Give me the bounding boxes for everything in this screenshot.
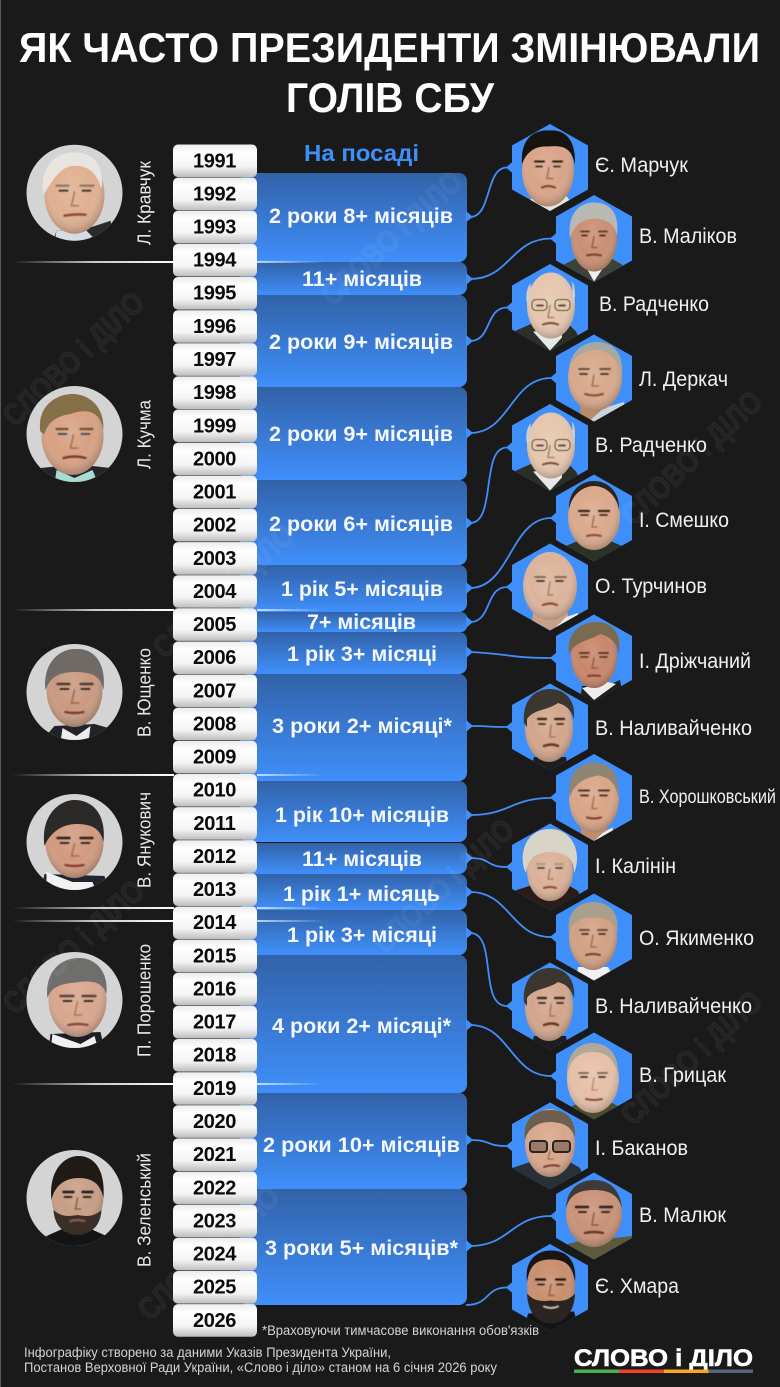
security chief names: В. Малюк	[639, 1204, 727, 1227]
president: Yanukovych	[26, 794, 122, 892]
watermarks: СЛОВО і ДІЛО	[314, 164, 469, 312]
president: Poroshenko	[26, 952, 122, 1050]
security chief names: О. Якименко	[639, 927, 754, 950]
year 2019	[173, 1072, 257, 1105]
year 2022: 2022	[193, 1177, 236, 1199]
year 2016	[173, 973, 257, 1005]
year 2018	[173, 1039, 257, 1072]
portrait: Hrytsak	[550, 1032, 632, 1120]
security chief names: В. Наливайченко	[595, 995, 752, 1018]
portrait: Radchenko, second term	[506, 404, 588, 492]
year 2004	[173, 575, 257, 608]
year 2011	[173, 807, 257, 840]
year 2010: 2010	[193, 780, 236, 802]
year 2004: 2004	[193, 581, 237, 603]
year 2002	[173, 509, 257, 542]
portrait: Khmara	[506, 1244, 588, 1332]
president: Kravchuk	[26, 145, 122, 243]
portrait: Kalinin	[506, 824, 588, 911]
portrait: Khoroshkovskyi	[550, 754, 632, 842]
security chief names: Л. Деркач	[639, 368, 728, 391]
year 2000: 2000	[193, 448, 236, 470]
bar: Kalinin term: 11+ місяців	[302, 847, 422, 871]
year 1994: 1994	[193, 249, 237, 271]
watermarks: СЛОВО і ДІЛО	[0, 285, 151, 433]
year 1991	[173, 144, 257, 177]
bar: Malikov term	[240, 262, 473, 295]
bar: Malikov term: 11+ місяців	[302, 267, 422, 291]
year 2001	[173, 476, 257, 508]
year 1993: 1993	[193, 216, 236, 238]
year 1991: 1991	[193, 150, 236, 172]
security chief names: І. Дріжчаний	[639, 650, 751, 673]
year 1999	[173, 410, 257, 442]
year 2020: 2020	[193, 1111, 236, 1133]
year 2006: 2006	[193, 647, 236, 669]
timeline of years	[173, 144, 257, 1337]
connector lines from bars to portraits	[466, 168, 551, 1305]
year 2012	[173, 840, 257, 873]
security chief names: О. Турчинов	[595, 575, 707, 598]
watermarks: СЛОВО і ДІЛО	[0, 873, 151, 1021]
year 1996: 1996	[193, 316, 236, 338]
column heading: in office: На посаді	[304, 140, 419, 166]
year 2026: 2026	[193, 1310, 236, 1332]
bar: Marchuk term: 2 роки 8+ місяців	[269, 204, 453, 228]
year 1993	[173, 211, 257, 243]
watermarks: СЛОВО і ДІЛО	[131, 1179, 286, 1327]
president names, rotated: В. Янукович	[134, 792, 154, 888]
bar: Radchenko term	[240, 295, 473, 387]
security chief names: Є. Хмара	[595, 1275, 679, 1298]
source note: Інфографіку створено за даними Указів Президента України,	[24, 1345, 391, 1360]
year 2008: 2008	[193, 713, 236, 735]
year 2017: 2017	[193, 1012, 236, 1034]
portrait: Malikov	[550, 195, 632, 282]
security chief names: І. Калінін	[595, 855, 676, 878]
year 2025	[173, 1271, 257, 1304]
bar: Derkach term	[240, 387, 473, 480]
year 2024	[173, 1238, 257, 1270]
year 2005: 2005	[193, 614, 236, 636]
portrait: Marchuk	[506, 124, 588, 212]
year 2019: 2019	[193, 1078, 236, 1100]
president names, rotated: В. Зеленський	[134, 1153, 154, 1267]
president names, rotated: В. Ющенко	[134, 648, 154, 737]
year 2009	[173, 741, 257, 774]
year 2011: 2011	[194, 813, 236, 835]
year 2006	[173, 642, 257, 674]
portrait: Turchynov	[506, 544, 588, 631]
bar: Bakanov term	[240, 1093, 473, 1189]
year 2007: 2007	[193, 680, 236, 702]
bar: Khoroshkovskyi term	[240, 781, 473, 842]
president: Yushchenko	[26, 644, 122, 742]
president names, rotated	[134, 161, 154, 1267]
bar: Marchuk term	[240, 173, 473, 262]
portrait: Nalyvaichenko	[506, 684, 588, 771]
portrait: Bakanov	[506, 1102, 588, 1190]
bar: Drizhchanyi term: 1 рік 3+ місяці	[287, 642, 437, 666]
year 1998	[173, 376, 257, 409]
bar: Hrytsak term: 4 роки 2+ місяці*	[272, 1014, 452, 1038]
year 2015: 2015	[193, 945, 236, 967]
president names, rotated: Л. Кучма	[134, 399, 154, 469]
year 2014	[173, 906, 257, 939]
portrait: Derkach	[550, 334, 632, 422]
president: Kuchma	[26, 386, 122, 484]
president names, rotated: П. Порошенко	[134, 944, 154, 1057]
year 1995	[173, 277, 257, 310]
security chief names: В. Наливайченко	[595, 717, 752, 740]
year 1995: 1995	[193, 282, 236, 304]
portrait: Smeshko	[550, 474, 632, 562]
year 1992	[173, 178, 257, 210]
watermarks: СЛОВО і ДІЛО	[366, 812, 521, 960]
bar: Turchynov term: 7+ місяців	[307, 610, 416, 634]
year 1992: 1992	[193, 183, 236, 205]
bar: Hrytsak term	[240, 955, 473, 1093]
bar: Maliuk term: 3 роки 5+ місяців*	[265, 1236, 459, 1260]
year 2017	[173, 1006, 257, 1038]
security chief names: В. Грицак	[639, 1064, 727, 1087]
president names, rotated: Л. Кравчук	[134, 161, 154, 245]
year 2005	[173, 608, 257, 641]
year 2026	[173, 1304, 257, 1337]
presidential term divider lines	[12, 261, 325, 1085]
bar: Radchenko second term: 2 роки 6+ місяців	[269, 512, 453, 536]
year 2020	[173, 1105, 257, 1138]
bar: Smeshko term: 1 рік 5+ місяців	[281, 577, 443, 601]
year 2003	[173, 542, 257, 575]
president: Zelensky	[26, 1150, 122, 1248]
bar: Drizhchanyi term	[240, 632, 473, 674]
year 2003: 2003	[193, 548, 236, 570]
year 2012: 2012	[193, 846, 236, 868]
year 2018: 2018	[193, 1045, 236, 1067]
year 2001: 2001	[193, 482, 236, 504]
year 2002: 2002	[193, 515, 236, 537]
bar: Nalyvaichenko second term: 1 рік 3+ місяці	[287, 923, 437, 947]
portrait: Yakymenko	[550, 894, 632, 981]
bar: Derkach term: 2 роки 9+ місяців	[269, 422, 453, 446]
year 2013: 2013	[193, 879, 236, 901]
portrait: Drizhchanyi	[550, 614, 632, 702]
security chief names: В. Радченко	[599, 293, 709, 316]
terms of office bars	[240, 173, 473, 1305]
year 2014: 2014	[193, 912, 237, 934]
year 1996	[173, 310, 257, 343]
bar: Smeshko term	[240, 565, 473, 612]
bar: Yakymenko term: 1 рік 1+ місяць	[283, 882, 440, 906]
title: ГОЛІВ СБУ	[286, 74, 495, 121]
security chief names: В. Радченко	[595, 434, 707, 457]
security chief names	[595, 154, 776, 1298]
portrait: Radchenko	[506, 264, 588, 352]
bar: Bakanov term: 2 роки 10+ місяців	[263, 1133, 460, 1157]
year 2021: 2021	[193, 1144, 236, 1166]
year 2013	[173, 873, 257, 906]
year 2009: 2009	[193, 747, 236, 769]
bar: Nalyvaichenko term	[240, 674, 473, 781]
logo: Слово і діло: СЛОВО і ДІЛО	[574, 1345, 753, 1372]
bar: Yakymenko term	[240, 874, 473, 910]
title	[19, 24, 760, 121]
year 2022	[173, 1172, 257, 1204]
security chief names: Є. Марчук	[595, 154, 689, 177]
portrait: Nalyvaichenko, second term	[506, 962, 588, 1050]
year 2024: 2024	[193, 1243, 237, 1265]
security chief names: В. Маліков	[639, 225, 737, 248]
source note: Постанов Верховної Ради України, «Слово і діло» станом на 6 січня 2026 року	[24, 1360, 497, 1375]
year 2008	[173, 708, 257, 740]
bar: Radchenko second term	[240, 480, 473, 565]
year 1997: 1997	[193, 349, 236, 371]
year 1999: 1999	[193, 415, 236, 437]
year 2023	[173, 1205, 257, 1237]
year 2010	[173, 774, 257, 807]
year 2023: 2023	[193, 1210, 236, 1232]
portrait: Maliuk	[550, 1172, 632, 1260]
year 2000	[173, 443, 257, 475]
bar: Nalyvaichenko term: 3 роки 2+ місяці*	[272, 714, 453, 738]
security chief names: І. Смешко	[639, 509, 729, 532]
year 1997	[173, 343, 257, 376]
bar: Maliuk term	[240, 1189, 473, 1305]
source note	[24, 1345, 497, 1375]
year 2015	[173, 940, 257, 972]
year 1994	[173, 244, 257, 276]
year 2021	[173, 1138, 257, 1171]
bar: Nalyvaichenko second term	[240, 910, 473, 955]
bar: Kalinin term	[240, 843, 473, 874]
year 2025: 2025	[193, 1277, 236, 1299]
year 2007	[173, 675, 257, 707]
watermarks: СЛОВО і ДІЛО	[146, 517, 301, 665]
bar: Khoroshkovskyi term: 1 рік 10+ місяців	[275, 803, 449, 827]
bar: Turchynov term	[240, 610, 473, 634]
bar: Radchenko term: 2 роки 9+ місяців	[269, 330, 453, 354]
year 1998: 1998	[193, 382, 236, 404]
year 2016: 2016	[193, 979, 236, 1001]
security chief names: І. Баканов	[595, 1137, 688, 1160]
footnote: *Враховуючи тимчасове виконання обов'язків	[262, 1323, 539, 1338]
